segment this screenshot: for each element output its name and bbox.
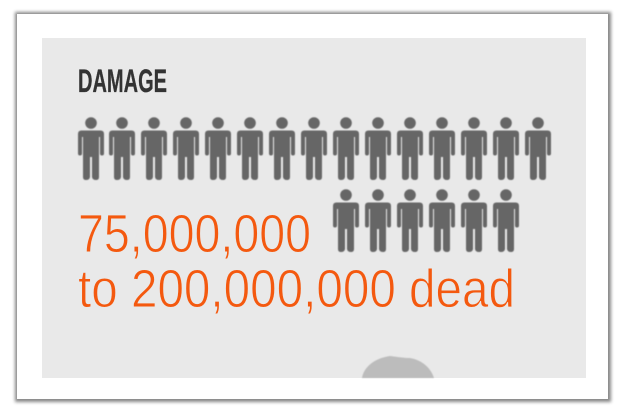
icon row: six people [333,189,519,252]
death toll figure [78,204,515,319]
death toll figure: to 200,000,000 dead [78,259,515,319]
cropped grey shape [362,356,434,378]
icon row: fifteen people [78,117,551,180]
panel: damage [42,38,586,378]
heading: damage: DAMAGE [78,63,167,99]
death toll figure: 75,000,000 [78,204,311,264]
